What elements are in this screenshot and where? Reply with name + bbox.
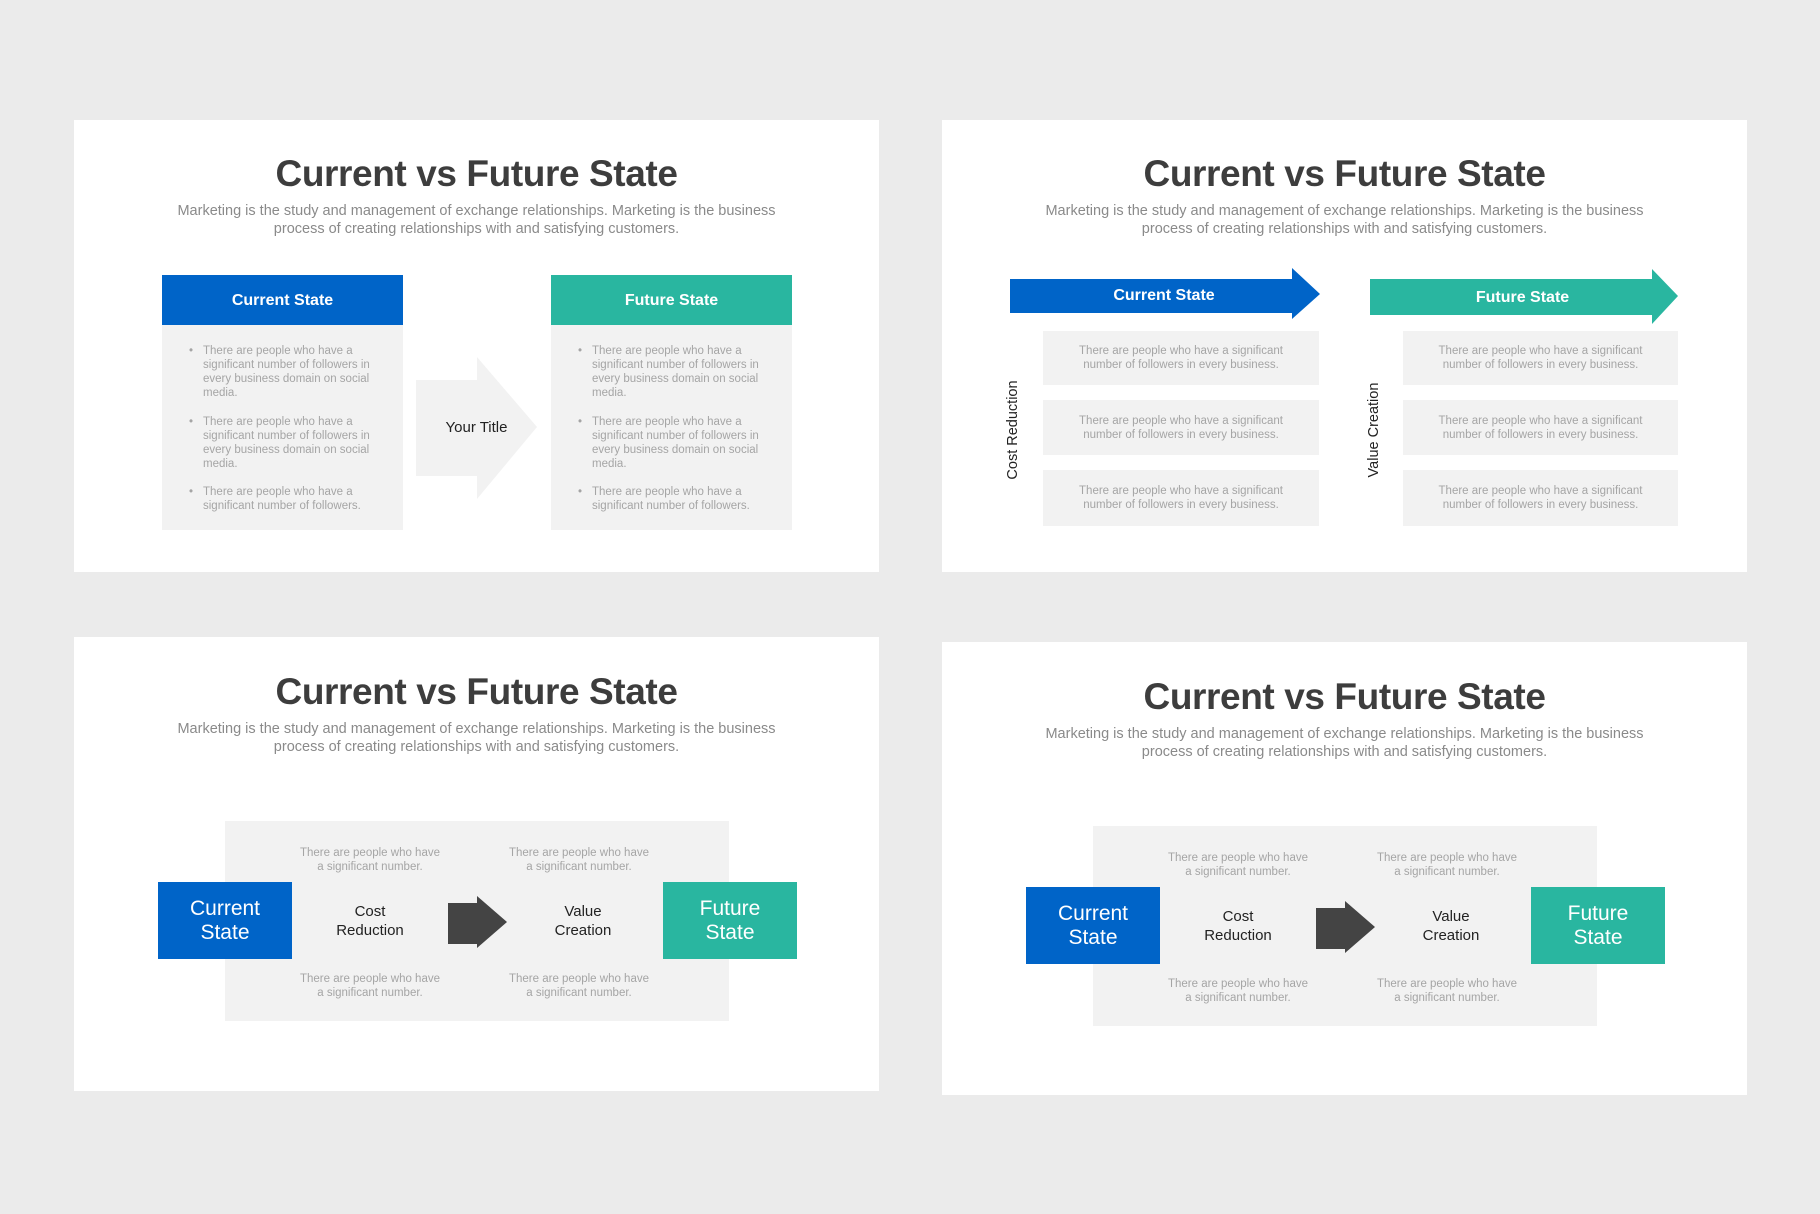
flow diagram: a significant number. bbox=[1394, 992, 1500, 1004]
box: current state bbox=[1026, 887, 1160, 964]
flow diagram: a significant number. bbox=[1185, 866, 1291, 878]
arrow: future state bbox=[1370, 269, 1678, 324]
title: Current vs Future State bbox=[276, 153, 678, 194]
flow diagram: a significant number. bbox=[1394, 866, 1500, 878]
title: Current vs Future State bbox=[1144, 676, 1546, 717]
flow diagram: a significant number. bbox=[1185, 992, 1291, 1004]
label: value creation: Value Creation bbox=[1366, 383, 1382, 477]
bullet list: There are people who have a significant number of followers in every business domain on social media. bbox=[203, 416, 370, 470]
subtitle: Marketing is the study and management of exchange relationships. Marketing is the business bbox=[177, 721, 776, 737]
current state column bbox=[162, 275, 403, 530]
box: future state bbox=[663, 882, 797, 959]
header: current state: Current State bbox=[232, 292, 333, 309]
box: future state: Future bbox=[700, 896, 760, 920]
bullet list: There are people who have a significant number of followers in every business domain on social media. bbox=[592, 345, 759, 399]
boxes: value creation: number of followers in every business. bbox=[1443, 499, 1638, 511]
text: cost reduction: Reduction bbox=[336, 922, 404, 939]
text: cost reduction: Reduction bbox=[1204, 927, 1272, 944]
flow diagram: There are people who have bbox=[509, 973, 649, 985]
flow diagram: a significant number. bbox=[317, 861, 423, 873]
text: cost reduction bbox=[1204, 908, 1272, 944]
boxes: cost reduction: There are people who have a significant bbox=[1079, 485, 1283, 497]
title: Current vs Future State bbox=[1144, 153, 1546, 194]
boxes: value creation: number of followers in every business. bbox=[1443, 428, 1638, 440]
icon: dark arrow bbox=[1316, 901, 1375, 953]
bullet list: There are people who have a significant number of followers in every business domain on social media. bbox=[203, 345, 370, 399]
text: value creation: Value bbox=[564, 903, 602, 920]
boxes: cost reduction bbox=[1043, 331, 1319, 526]
box: current state: State bbox=[200, 920, 250, 944]
text: value creation bbox=[555, 903, 611, 939]
panel: top-left bbox=[74, 120, 879, 572]
subtitle bbox=[1045, 726, 1644, 760]
bullet list: There are people who have a significant number of followers in every business domain on social media. bbox=[592, 416, 759, 470]
box: future state bbox=[1531, 887, 1665, 964]
boxes: cost reduction: There are people who have a significant bbox=[1079, 414, 1283, 426]
boxes: value creation: There are people who have a significant bbox=[1439, 345, 1642, 357]
flow diagram: There are people who have bbox=[1377, 978, 1517, 990]
header: future state bbox=[551, 275, 792, 325]
flow diagram: a significant number. bbox=[526, 861, 632, 873]
subtitle: Marketing is the study and management of exchange relationships. Marketing is the business bbox=[1045, 203, 1644, 219]
text: cost reduction bbox=[336, 903, 404, 939]
text: cost reduction: Cost bbox=[355, 903, 385, 920]
subtitle: process of creating relationships with and satisfying customers. bbox=[274, 739, 679, 755]
subtitle: Marketing is the study and management of exchange relationships. Marketing is the business bbox=[1045, 726, 1644, 742]
flow diagram: There are people who have bbox=[509, 847, 649, 859]
text: value creation: Creation bbox=[555, 922, 611, 939]
subtitle bbox=[177, 203, 776, 237]
box: current state: State bbox=[1068, 926, 1118, 948]
text: value creation: Creation bbox=[1423, 927, 1479, 944]
arrow: current state: Current State bbox=[1113, 287, 1215, 304]
bullet list: There are people who have a significant number of followers. bbox=[203, 486, 361, 512]
box: current state: Current bbox=[190, 896, 260, 920]
flow diagram: a significant number. bbox=[317, 987, 423, 999]
flow diagram: a significant number. bbox=[526, 987, 632, 999]
label: cost reduction: Cost Reduction bbox=[1005, 380, 1021, 480]
boxes: cost reduction: number of followers in every business. bbox=[1083, 359, 1279, 371]
bullet list: There are people who have a significant number of followers. bbox=[592, 486, 750, 512]
panel: bottom-left bbox=[74, 637, 879, 1091]
boxes: value creation bbox=[1403, 331, 1678, 526]
boxes: cost reduction: There are people who have a significant bbox=[1079, 345, 1283, 357]
arrow: your title: Your Title bbox=[446, 419, 508, 436]
text: value creation: Value bbox=[1432, 908, 1470, 925]
panel: bottom-right bbox=[942, 642, 1747, 1095]
boxes: value creation: There are people who have a significant bbox=[1439, 414, 1642, 426]
text: value creation bbox=[1423, 908, 1479, 944]
bullet list bbox=[551, 325, 792, 530]
header: future state: Future State bbox=[625, 292, 718, 309]
panel: top-right bbox=[942, 120, 1747, 572]
flow diagram: There are people who have bbox=[1168, 978, 1308, 990]
subtitle: process of creating relationships with and satisfying customers. bbox=[274, 221, 679, 237]
box: current state: Current bbox=[1058, 902, 1128, 924]
icon: dark arrow bbox=[448, 896, 507, 948]
subtitle: process of creating relationships with and satisfying customers. bbox=[1142, 221, 1547, 237]
subtitle: process of creating relationships with and satisfying customers. bbox=[1142, 744, 1547, 760]
future state column bbox=[551, 275, 792, 530]
box: future state: State bbox=[705, 920, 755, 944]
boxes: cost reduction: number of followers in every business. bbox=[1083, 499, 1279, 511]
box: current state bbox=[158, 882, 292, 959]
boxes: value creation: number of followers in every business. bbox=[1443, 359, 1638, 371]
title: Current vs Future State bbox=[276, 671, 678, 712]
text: cost reduction: Cost bbox=[1223, 908, 1253, 925]
flow diagram: There are people who have bbox=[1377, 852, 1517, 864]
flow diagram: There are people who have bbox=[300, 973, 440, 985]
boxes: cost reduction: number of followers in every business. bbox=[1083, 428, 1279, 440]
subtitle bbox=[1045, 203, 1644, 237]
arrow: your title bbox=[416, 358, 536, 498]
header: current state bbox=[162, 275, 403, 325]
bullet list bbox=[162, 325, 403, 530]
flow diagram bbox=[1026, 826, 1665, 1026]
flow diagram: There are people who have bbox=[300, 847, 440, 859]
subtitle: Marketing is the study and management of exchange relationships. Marketing is the business bbox=[177, 203, 776, 219]
arrow: future state: Future State bbox=[1476, 289, 1569, 306]
flow diagram: There are people who have bbox=[1168, 852, 1308, 864]
box: future state: State bbox=[1573, 926, 1623, 948]
flow diagram bbox=[158, 821, 797, 1021]
arrow: current state bbox=[1010, 268, 1320, 319]
box: future state: Future bbox=[1568, 902, 1628, 924]
boxes: value creation: There are people who have a significant bbox=[1439, 485, 1642, 497]
subtitle bbox=[177, 721, 776, 755]
